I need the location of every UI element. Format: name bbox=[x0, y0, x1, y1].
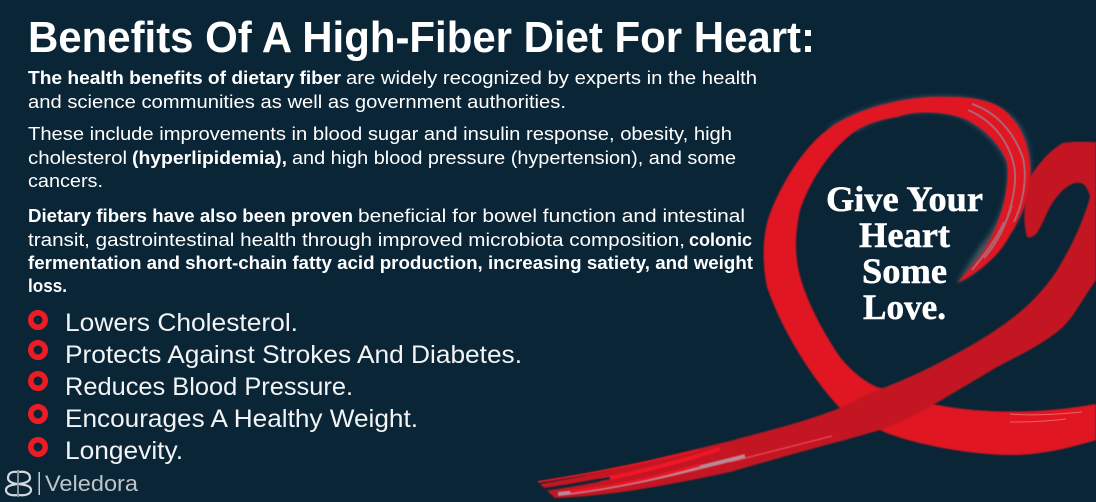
bullet: reduces blood pressure: Reduces Blood Pressure. bbox=[65, 373, 353, 401]
intro paragraph two: cholesterol bbox=[28, 148, 127, 168]
bullet: protects against strokes and diabetes: Protects Against Strokes And Diabetes. bbox=[65, 341, 522, 369]
logo wordmark: Veledora bbox=[45, 471, 139, 496]
intro paragraph two: These include improvements in blood sugar and insulin response, obesity, high bbox=[28, 124, 732, 144]
brush tail bbox=[538, 436, 832, 494]
light red ribbon loop bbox=[764, 97, 1096, 455]
bullet: lowers cholesterol: Lowers Cholesterol. bbox=[65, 309, 298, 337]
logo divider bbox=[38, 472, 40, 495]
benefits list bbox=[31, 309, 522, 465]
bullet: encourages a healthy weight: Encourages A Healthy Weight. bbox=[65, 405, 418, 433]
bullet: longevity: Longevity. bbox=[65, 437, 183, 465]
brand logo bbox=[6, 470, 139, 497]
intro paragraph two: cancers. bbox=[28, 171, 103, 191]
title: Benefits Of A High-Fiber Diet For Heart: bbox=[28, 13, 815, 62]
intro paragraph one: and science communities as well as government authorities. bbox=[28, 92, 566, 112]
heart slogan: Heart bbox=[859, 215, 950, 255]
intro paragraph three bbox=[28, 206, 753, 296]
intro paragraph three: transit, gastrointestinal health through improved microbiota composition, bbox=[28, 230, 685, 250]
intro paragraph two: (hyperlipidemia), bbox=[132, 148, 287, 168]
heart slogan: Give Your bbox=[826, 179, 983, 219]
intro paragraph three: Dietary fibers have also been proven bbox=[28, 206, 353, 226]
heart slogan: Some bbox=[862, 251, 947, 291]
dark red ribbon crossing bbox=[540, 142, 1096, 498]
intro paragraph two: and high blood pressure (hypertension), and some bbox=[292, 148, 736, 168]
intro paragraph one: are widely recognized by experts in the health bbox=[346, 68, 757, 88]
intro paragraph one bbox=[28, 68, 757, 112]
intro paragraph one: The health benefits of dietary fiber bbox=[28, 68, 341, 88]
intro paragraph three: beneficial for bowel function and intestinal bbox=[358, 206, 745, 226]
icon: logo mark bbox=[6, 470, 31, 497]
ribbon glow bbox=[827, 97, 1030, 283]
heart ribbon illustration bbox=[538, 97, 1096, 498]
intro paragraph three: fermentation and short-chain fatty acid production, increasing satiety, and weight bbox=[28, 253, 753, 273]
intro paragraph three: loss. bbox=[28, 276, 67, 296]
intro paragraph two bbox=[28, 124, 736, 191]
bottom right highlights bbox=[1010, 412, 1082, 422]
brush streaks on top of loop bbox=[968, 104, 1025, 270]
heart slogan: Love. bbox=[863, 287, 946, 327]
intro paragraph three: colonic bbox=[689, 230, 752, 250]
heart slogan bbox=[826, 179, 983, 327]
